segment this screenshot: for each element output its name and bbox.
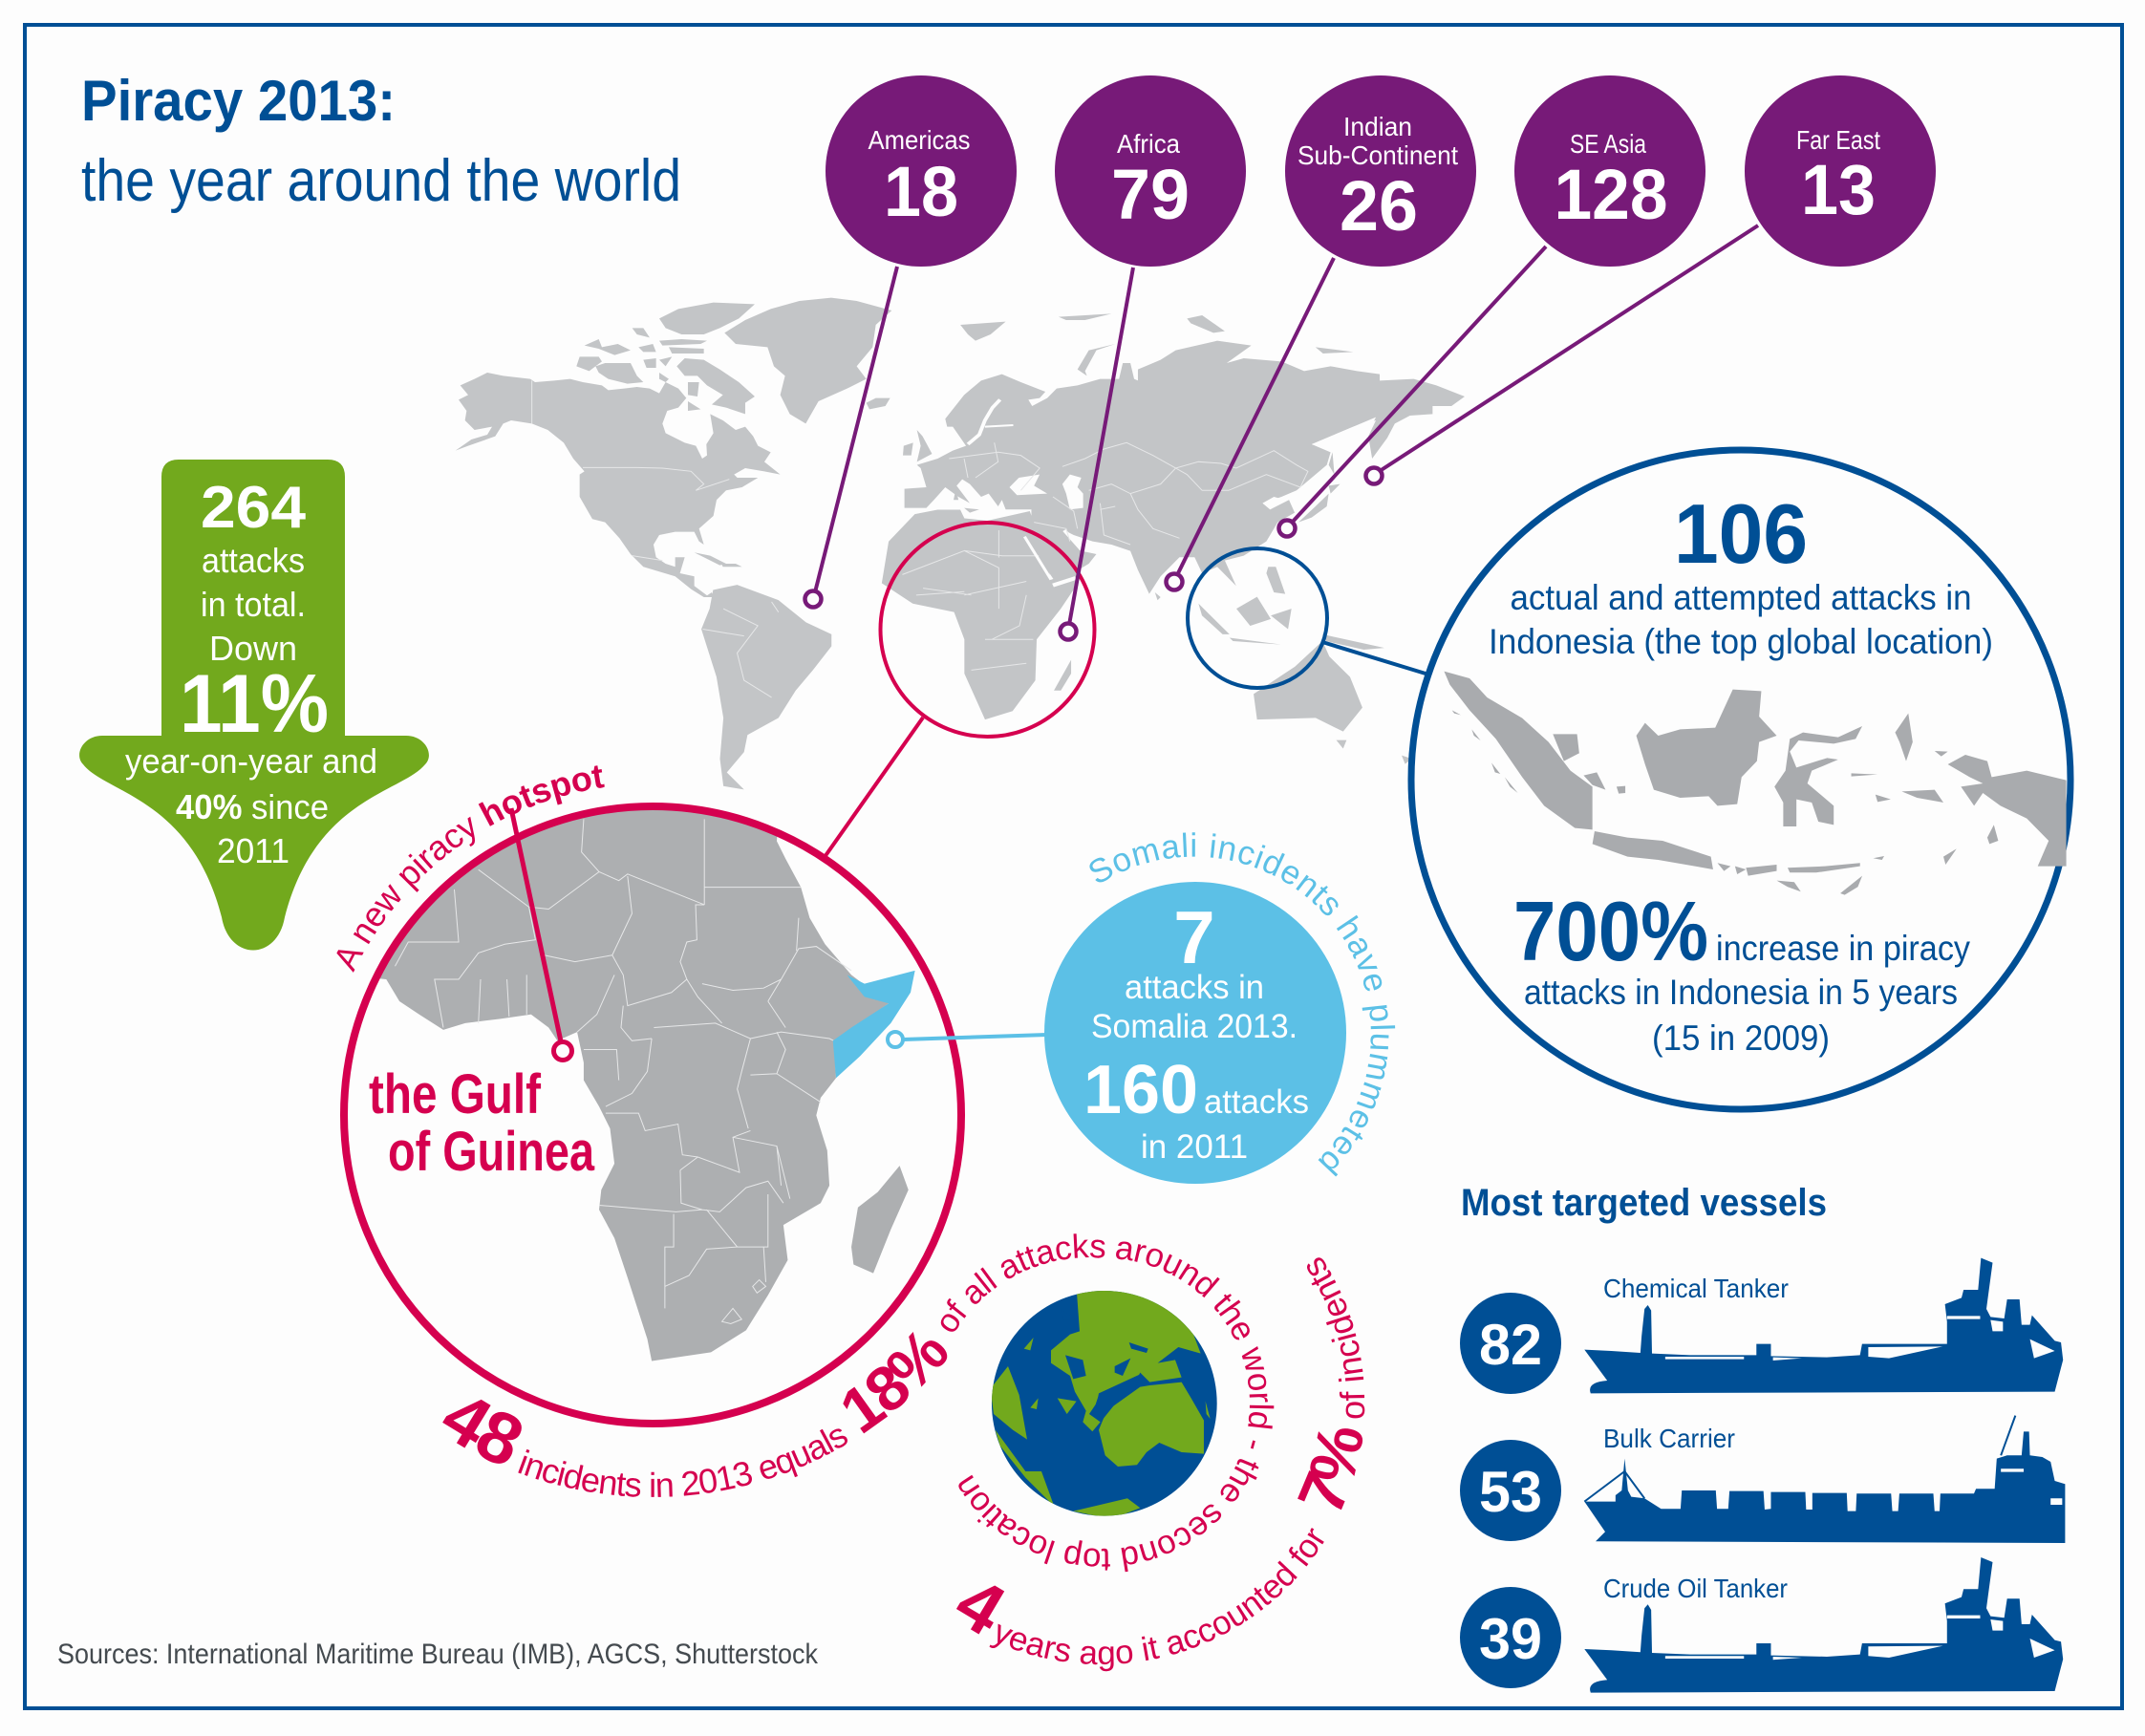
Somalia figures: 7 [1173, 895, 1215, 979]
blue locator circle: Indonesia [1188, 548, 1327, 688]
curved label: A new piracy hotspot: A new piracy hotspot [336, 765, 605, 973]
Africa: Africa [1117, 129, 1180, 159]
vessel: Bulk Carrier: 53 [1479, 1460, 1542, 1524]
Americas: Americas [868, 125, 971, 155]
sources: Sources: International Maritime Bureau (IMB), AGCS, Shutterstock [57, 1639, 819, 1670]
panel: Somalia [886, 832, 1395, 1184]
Indian Sub-Continent: Indian [1343, 112, 1412, 141]
106 attacks: actual and attempted attacks in [1510, 578, 1972, 617]
title: the year around the world [81, 148, 681, 214]
700% increase: attacks in Indonesia in 5 years [1524, 973, 1958, 1012]
regional attack counts [804, 75, 1936, 640]
green arrow: total attacks: 40% since [176, 787, 329, 826]
Indonesia map [1444, 672, 2067, 895]
Somalia figures: Somalia 2013. [1091, 1008, 1298, 1045]
Somalia figures: attacks [1204, 1083, 1309, 1121]
Iceland [867, 398, 890, 409]
SE Asia: 128 [1554, 155, 1668, 234]
country borders [949, 442, 1308, 545]
green arrow: total attacks: attacks [202, 541, 305, 580]
world map [456, 298, 1465, 789]
700% increase: 700% [1513, 884, 1708, 978]
Somalia figures: in 2011 [1141, 1128, 1248, 1166]
Somalia highlighted [833, 971, 915, 1078]
curved stat: 4 years ago 7% [956, 1257, 1364, 1672]
green arrow: total attacks: year-on-year and [125, 741, 377, 781]
Africa [1055, 75, 1246, 640]
curved stat: 4 years ago 7%: 4 [956, 1586, 1005, 1634]
Far East [1366, 75, 1936, 483]
curved stat: 4 years ago 7%: of incidents [1307, 1257, 1364, 1418]
Far East: 13 [1801, 150, 1876, 229]
curved text: attacks around the world: of all attacks around the world - the second top location [940, 1233, 1275, 1573]
Europe and Asia islands [903, 313, 1353, 600]
blue connector line [1322, 642, 1426, 674]
curved stat: 48 incidents equals 18%: incidents in 2013 equals [518, 1428, 847, 1497]
green arrow: total attacks: 11% [180, 658, 329, 750]
Americas north of the equator [456, 298, 891, 597]
green arrow: total attacks: in total. [201, 585, 306, 624]
the Gulf of Guinea label [369, 1063, 595, 1183]
green arrow: total attacks: Down [209, 629, 297, 668]
Somalia pointer [888, 1032, 1047, 1047]
Alaska and US borders [532, 380, 729, 561]
curved stat: 48 incidents equals 18% [442, 1332, 948, 1497]
title [81, 69, 681, 214]
heading: Most targeted vessels: Most targeted vessels [1461, 1182, 1827, 1224]
panel: Indonesia [1411, 450, 2070, 1109]
vessel: Crude Oil Tanker: 39 [1479, 1607, 1542, 1671]
Americas [804, 75, 1017, 608]
pink connector line [825, 718, 923, 857]
vessel: Chemical Tanker: 82 [1479, 1313, 1542, 1377]
Greenland [724, 298, 891, 423]
the Gulf of Guinea label: of Guinea [388, 1121, 595, 1183]
panel: Africa close-up [336, 765, 965, 1427]
Somalia circle [1044, 882, 1346, 1184]
vessel: Bulk Carrier: Bulk Carrier [1603, 1424, 1735, 1453]
vessel: Bulk Carrier [1460, 1416, 2065, 1543]
Somalia figures: attacks in [1125, 969, 1264, 1006]
Americas: 18 [884, 152, 958, 231]
Somalia figures: 160 [1083, 1052, 1198, 1128]
700% increase: (15 in 2009) [1652, 1018, 1830, 1058]
vessel: Crude Oil Tanker: Crude Oil Tanker [1603, 1574, 1788, 1603]
Africa ring [344, 806, 961, 1424]
Indian Sub-Continent: Sub-Continent [1298, 140, 1458, 170]
vessel: Crude Oil Tanker [1460, 1557, 2063, 1693]
vessel: Chemical Tanker [1460, 1258, 2063, 1394]
Far East: Far East [1796, 125, 1880, 155]
700% increase [1513, 884, 1970, 1058]
green arrow: total attacks [79, 460, 429, 950]
vessel: Chemical Tanker: Chemical Tanker [1603, 1274, 1789, 1303]
Baja gulf [602, 524, 621, 551]
green arrow: total attacks: 264 [201, 475, 307, 541]
Eurasia [903, 313, 1465, 600]
curved stat: 48 incidents equals 18%: 18% [843, 1332, 948, 1433]
700% increase: increase in piracy [1716, 929, 1970, 968]
curved stat: 4 years ago 7%: years ago it accounted for [990, 1528, 1324, 1672]
106 attacks: Indonesia (the top global location) [1489, 622, 1993, 661]
Indonesia ring [1411, 450, 2070, 1109]
Indian Sub-Continent [1166, 75, 1476, 590]
curved text: Somali incidents: Somali incidents have plummeted [1089, 832, 1395, 1177]
pink locator circle: Africa [881, 523, 1095, 737]
title: Piracy 2013: [81, 69, 396, 133]
inland seas [968, 399, 1376, 586]
106 attacks: 106 [1674, 486, 1808, 581]
106 attacks [1489, 486, 1993, 661]
SE Asia: SE Asia [1570, 129, 1646, 159]
Arctic islands [576, 303, 755, 414]
Indian Sub-Continent: 26 [1340, 166, 1418, 246]
icon: globe [991, 1283, 1217, 1519]
the Gulf of Guinea label: the Gulf [369, 1063, 542, 1125]
green arrow: total attacks: 2011 [217, 831, 290, 870]
SE Asia [1278, 75, 1705, 537]
country borders [395, 819, 851, 1323]
curved stat: 4 years ago 7%: 7% [1298, 1428, 1362, 1510]
Madagascar [851, 1166, 909, 1274]
Somalia figures [1083, 895, 1309, 1166]
South America, Africa, Australia [701, 510, 1412, 789]
hotspot pointer [511, 808, 571, 1061]
Africa: 79 [1111, 155, 1190, 234]
curved stat: 48 incidents equals 18%: 48 [442, 1399, 522, 1464]
Caribbean [695, 552, 742, 567]
Africa map [380, 810, 915, 1361]
